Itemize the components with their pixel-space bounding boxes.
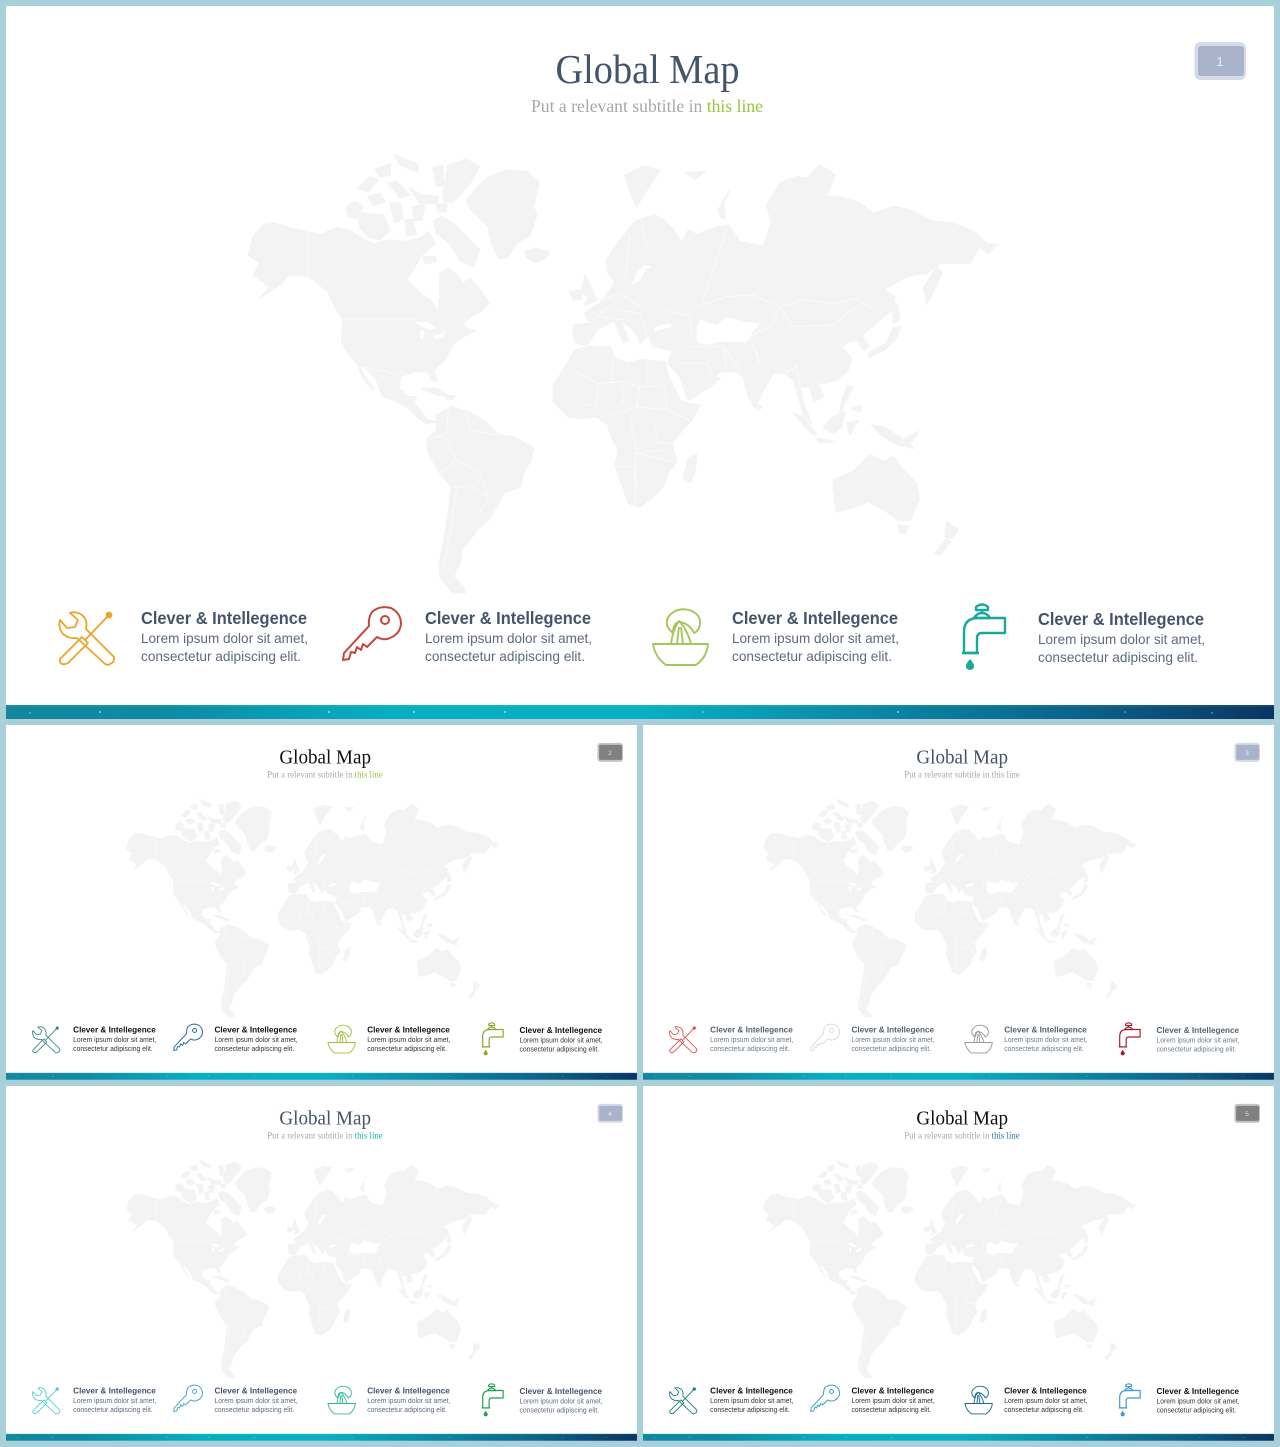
text block: item 3: consectetur adipiscing elit. — [367, 1046, 447, 1053]
text block: item 3 — [1004, 1386, 1087, 1414]
text block: item 2 — [214, 1386, 298, 1414]
text block: item 3 — [367, 1386, 450, 1414]
page number badge: 4 — [608, 1111, 612, 1118]
title: Global Map — [279, 1107, 371, 1129]
text block: item 3: consectetur adipiscing elit. — [732, 648, 892, 664]
icon: juicer — [653, 609, 708, 665]
text block: item 1: Clever & Intellegence — [710, 1025, 793, 1035]
text block: item 4: Lorem ipsum dolor sit amet, — [520, 1398, 603, 1405]
icon: key — [174, 1024, 203, 1050]
footer bar — [6, 1073, 637, 1080]
text block: item 3: Clever & Intellegence — [367, 1386, 450, 1396]
icon: juicer — [965, 1025, 992, 1053]
text block: item 1: Lorem ipsum dolor sit amet, — [710, 1037, 793, 1044]
page number badge — [597, 743, 623, 762]
text block: item 2: Lorem ipsum dolor sit amet, — [214, 1398, 298, 1405]
page number badge: 1 — [1216, 54, 1224, 69]
footer bar — [643, 1073, 1274, 1080]
text block: item 4 — [1157, 1025, 1240, 1053]
text block: item 1: Clever & Intellegence — [141, 608, 307, 628]
subtitle: Put a relevant subtitle in this line — [267, 1131, 383, 1141]
footer bar — [643, 1434, 1274, 1441]
text block: item 4: consectetur adipiscing elit. — [1157, 1407, 1236, 1414]
subtitle: Put a relevant subtitle in this line — [267, 770, 383, 780]
subtitle: Put a relevant subtitle in this line — [531, 96, 763, 116]
text block: item 4: Lorem ipsum dolor sit amet, — [1157, 1037, 1240, 1044]
world map — [764, 1160, 1136, 1378]
text block: item 1: Clever & Intellegence — [710, 1386, 793, 1396]
text block: item 1: Lorem ipsum dolor sit amet, — [710, 1398, 793, 1405]
icon: juicer — [328, 1025, 355, 1053]
world map — [248, 155, 996, 593]
icon: tap — [1119, 1384, 1140, 1416]
text block: item 1 — [73, 1025, 156, 1053]
text block: item 2: consectetur adipiscing elit. — [851, 1046, 931, 1053]
text block: item 2 — [214, 1025, 298, 1053]
text block: item 3: consectetur adipiscing elit. — [367, 1407, 447, 1414]
footer bar — [6, 705, 1274, 719]
icon: wrench and screwdriver — [33, 1388, 60, 1414]
title: Global Map — [279, 746, 371, 768]
text block: item 4: consectetur adipiscing elit. — [1038, 649, 1198, 665]
panel: slide 2 — [6, 725, 637, 1080]
text block: item 3 — [732, 608, 899, 664]
text block: item 2: Clever & Intellegence — [214, 1025, 297, 1035]
text block: item 3: Lorem ipsum dolor sit amet, — [1004, 1398, 1087, 1405]
icon: tap — [482, 1384, 503, 1416]
text block: item 4: Clever & Intellegence — [520, 1386, 602, 1396]
panel: slide 3 — [643, 725, 1274, 1080]
page number badge — [597, 1104, 623, 1123]
text block: item 1: Lorem ipsum dolor sit amet, — [73, 1398, 156, 1405]
text block: item 3: consectetur adipiscing elit. — [1004, 1046, 1084, 1053]
title: Global Map — [916, 746, 1008, 768]
page number badge: 3 — [1245, 750, 1249, 757]
text block: item 4 — [520, 1025, 603, 1053]
icon: key — [811, 1385, 840, 1411]
text block: item 2: Lorem ipsum dolor sit amet, — [214, 1037, 298, 1044]
text block: item 1: Lorem ipsum dolor sit amet, — [141, 630, 308, 646]
text block: item 4: consectetur adipiscing elit. — [520, 1046, 599, 1053]
text block: item 2: Clever & Intellegence — [214, 1386, 297, 1396]
panel: slide 5 — [643, 1086, 1274, 1441]
text block: item 2: Clever & Intellegence — [851, 1025, 934, 1035]
panel: slide 1 — [6, 6, 1274, 719]
icon: wrench and screwdriver — [670, 1027, 697, 1053]
text block: item 2 — [851, 1386, 935, 1414]
text block: item 4: Clever & Intellegence — [520, 1025, 602, 1035]
world map — [764, 799, 1136, 1017]
icon: key — [811, 1024, 840, 1050]
text block: item 3: Lorem ipsum dolor sit amet, — [732, 630, 899, 646]
text block: item 3: Clever & Intellegence — [1004, 1025, 1087, 1035]
footer bar — [6, 1434, 637, 1441]
text block: item 4 — [1157, 1386, 1240, 1414]
page number badge: 5 — [1245, 1111, 1249, 1118]
text block: item 2 — [851, 1025, 935, 1053]
text block: item 1: consectetur adipiscing elit. — [73, 1407, 153, 1414]
icon: wrench and screwdriver — [59, 612, 114, 665]
icon: tap — [1119, 1023, 1140, 1055]
icon: tap — [482, 1023, 503, 1055]
icon: wrench and screwdriver — [33, 1027, 60, 1053]
text block: item 4: consectetur adipiscing elit. — [520, 1407, 599, 1414]
text block: item 2: consectetur adipiscing elit. — [214, 1046, 294, 1053]
icon: key — [174, 1385, 203, 1411]
text block: item 1: Clever & Intellegence — [73, 1025, 156, 1035]
text block: item 2: Lorem ipsum dolor sit amet, — [425, 630, 592, 646]
text block: item 3: Lorem ipsum dolor sit amet, — [367, 1037, 450, 1044]
page number badge — [1234, 743, 1260, 762]
text block: item 3: Lorem ipsum dolor sit amet, — [367, 1398, 450, 1405]
text block: item 4: Lorem ipsum dolor sit amet, — [1157, 1398, 1240, 1405]
text block: item 2: consectetur adipiscing elit. — [214, 1407, 294, 1414]
text block: item 2 — [425, 608, 592, 664]
text block: item 1 — [73, 1386, 156, 1414]
text block: item 1 — [710, 1025, 793, 1053]
text block: item 1: consectetur adipiscing elit. — [710, 1407, 790, 1414]
text block: item 1 — [710, 1386, 793, 1414]
text block: item 3 — [367, 1025, 450, 1053]
text block: item 1: consectetur adipiscing elit. — [73, 1046, 153, 1053]
text block: item 2: Lorem ipsum dolor sit amet, — [851, 1037, 935, 1044]
page number badge — [1234, 1104, 1260, 1123]
text block: item 4: consectetur adipiscing elit. — [1157, 1046, 1236, 1053]
text block: item 4: Clever & Intellegence — [1157, 1386, 1239, 1396]
icon: wrench and screwdriver — [670, 1388, 697, 1414]
world map — [127, 1160, 499, 1378]
text block: item 2: consectetur adipiscing elit. — [425, 648, 585, 664]
text block: item 2: Clever & Intellegence — [425, 608, 591, 628]
text block: item 4: Lorem ipsum dolor sit amet, — [1038, 631, 1205, 647]
text block: item 1: Clever & Intellegence — [73, 1386, 156, 1396]
title: Global Map — [916, 1107, 1008, 1129]
text block: item 3: consectetur adipiscing elit. — [1004, 1407, 1084, 1414]
icon: tap — [962, 604, 1005, 670]
world map — [127, 799, 499, 1017]
text block: item 1 — [141, 608, 308, 664]
text block: item 3: Clever & Intellegence — [367, 1025, 450, 1035]
subtitle: Put a relevant subtitle in this line — [904, 770, 1020, 780]
text block: item 2: Clever & Intellegence — [851, 1386, 934, 1396]
page number badge — [1194, 42, 1246, 80]
text block: item 4 — [520, 1386, 603, 1414]
panel: slide 4 — [6, 1086, 637, 1441]
icon: juicer — [965, 1386, 992, 1414]
text block: item 4: Clever & Intellegence — [1157, 1025, 1239, 1035]
text block: item 3: Clever & Intellegence — [732, 608, 898, 628]
text block: item 3: Clever & Intellegence — [1004, 1386, 1087, 1396]
text block: item 3: Lorem ipsum dolor sit amet, — [1004, 1037, 1087, 1044]
text block: item 1: Lorem ipsum dolor sit amet, — [73, 1037, 156, 1044]
page number badge: 2 — [608, 750, 612, 757]
text block: item 2: consectetur adipiscing elit. — [851, 1407, 931, 1414]
text block: item 4: Clever & Intellegence — [1038, 609, 1204, 629]
text block: item 1: consectetur adipiscing elit. — [710, 1046, 790, 1053]
text block: item 4 — [1038, 609, 1205, 665]
icon: juicer — [328, 1386, 355, 1414]
text block: item 4: Lorem ipsum dolor sit amet, — [520, 1037, 603, 1044]
text block: item 2: Lorem ipsum dolor sit amet, — [851, 1398, 935, 1405]
text block: item 1: consectetur adipiscing elit. — [141, 648, 301, 664]
icon: key — [343, 607, 401, 660]
subtitle: Put a relevant subtitle in this line — [904, 1131, 1020, 1141]
title: Global Map — [556, 46, 740, 92]
text block: item 3 — [1004, 1025, 1087, 1053]
